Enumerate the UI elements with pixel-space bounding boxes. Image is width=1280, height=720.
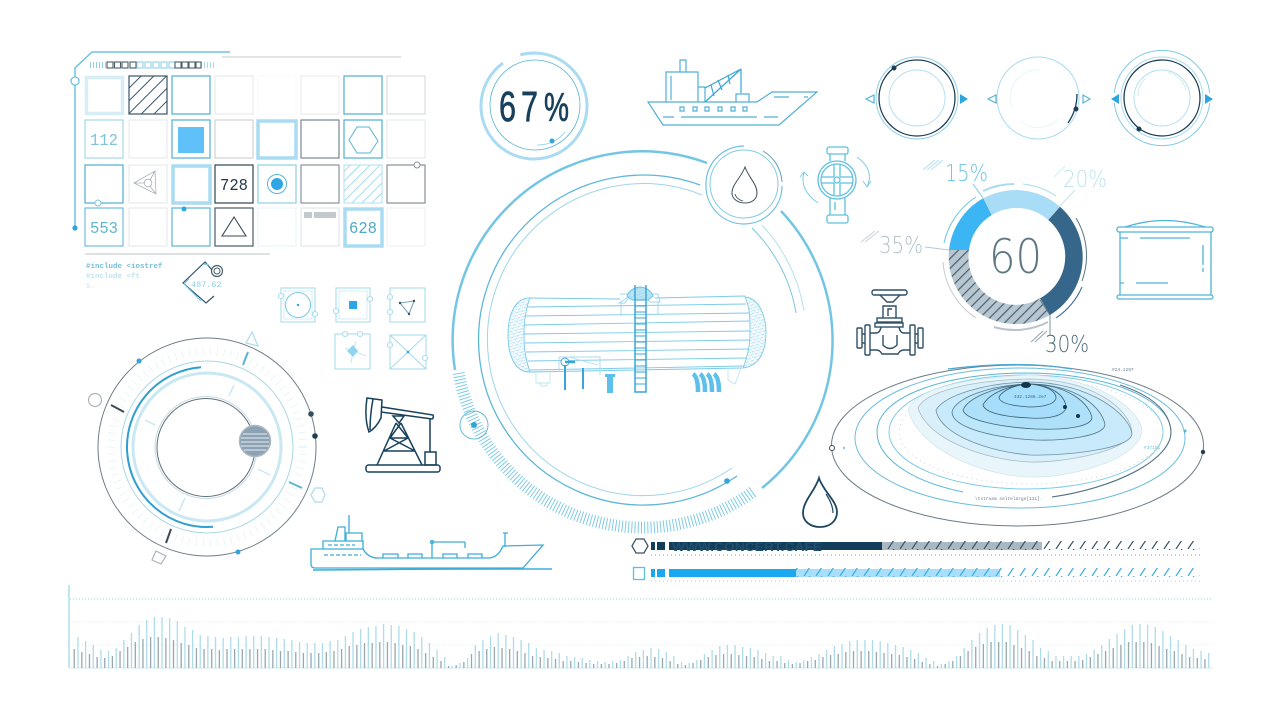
icon: tanker ship — [311, 515, 552, 570]
contour map — [830, 364, 1205, 526]
icon: handwheel valve with arrows — [800, 147, 871, 223]
icon: pumpjack — [366, 398, 440, 472]
grid row 3 — [85, 162, 425, 206]
icon: drop in circle — [706, 146, 782, 224]
central gauge rings — [453, 151, 833, 528]
label 30% — [1031, 300, 1089, 358]
label 35%: 35% — [879, 233, 923, 259]
label 30%: 30% — [1045, 332, 1089, 358]
dial gauge — [88, 332, 325, 564]
label 20%: 20% — [1063, 167, 1107, 193]
label 15% — [923, 160, 988, 198]
hoses — [693, 374, 719, 392]
contour map: 432.1288.2e7 — [1014, 394, 1047, 400]
code text — [86, 263, 163, 291]
label 15%: 15% — [945, 161, 988, 187]
light bars — [78, 617, 1209, 668]
icon: storage tank — [1117, 220, 1213, 299]
bar chart: waveform — [69, 585, 1212, 668]
label 35% — [861, 231, 949, 259]
code text: #include <ft — [86, 273, 140, 281]
tag: 487.62: 487.62 — [191, 280, 222, 290]
illustration: horizontal storage tank — [508, 285, 766, 393]
grid row 4: 628 — [349, 220, 377, 239]
dark bars — [74, 637, 1205, 668]
gauge ring 1 — [866, 57, 968, 139]
progress bar: dark — [632, 539, 1200, 555]
small icon: triangle nodes — [388, 288, 425, 322]
value 67%: % — [544, 86, 569, 130]
grid frame — [71, 52, 401, 254]
code text: S. — [86, 283, 95, 291]
grid row 2: 112 — [90, 132, 118, 151]
grid row 4: 553 — [90, 220, 118, 239]
ladder — [635, 285, 646, 392]
small icon: square — [334, 288, 372, 322]
progress bar: blue — [634, 568, 1200, 581]
panel: square grid — [71, 52, 425, 254]
contour map: \tstream seltelarge[111]. — [975, 496, 1043, 502]
tank pipework — [559, 357, 615, 393]
small icon: star — [335, 332, 370, 369]
donut value: 60 — [989, 230, 1042, 285]
value 67%: 7 — [521, 83, 538, 131]
dial knob — [240, 426, 270, 456]
contour map: #37151 — [1144, 445, 1161, 451]
code text: #include <iostref — [86, 263, 163, 271]
small icon: circle — [278, 288, 318, 322]
contour blobs — [908, 375, 1142, 477]
grid row 1 — [86, 76, 425, 114]
label 20% — [1054, 166, 1107, 206]
grid row 4 — [85, 206, 425, 246]
gauge: 67% — [481, 53, 587, 159]
grid row 2 — [85, 120, 425, 158]
donut chart — [861, 160, 1107, 358]
grid row 3: 728 — [220, 177, 248, 196]
gauge ring 3 — [1111, 50, 1213, 146]
segment 30% — [1040, 207, 1083, 315]
tag: 487.62 — [183, 262, 222, 303]
segment 35% — [949, 250, 1050, 324]
value 67% — [499, 83, 569, 131]
small icon set — [278, 288, 428, 369]
progress bar: dark: WWW.CONCERT.CAFE — [672, 540, 822, 554]
small icon: crossed square — [388, 335, 428, 369]
segment 15% — [949, 198, 992, 250]
node on tick arc — [460, 411, 488, 439]
icon: cargo ship — [648, 60, 817, 125]
contour map: #24.1297 — [1112, 367, 1134, 373]
segment 20% — [983, 190, 1060, 220]
icon: gate valve — [857, 290, 923, 355]
value 67%: 6 — [499, 83, 516, 131]
icon: large oil drop — [803, 478, 837, 527]
gauge ring 2 — [988, 57, 1090, 139]
